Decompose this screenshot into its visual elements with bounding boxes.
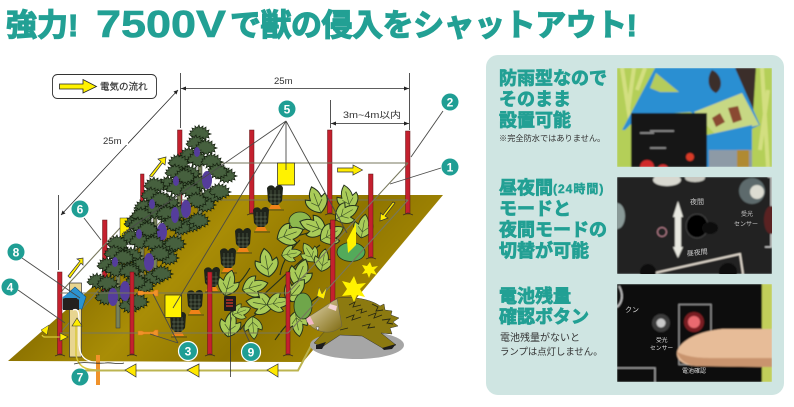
- green vine crops: [215, 182, 375, 340]
- photo: energizer in grass: [617, 68, 772, 167]
- title: 7500V: [96, 4, 227, 46]
- note: battery lamp: 電池残量がないと: [500, 331, 580, 344]
- title: 強力!: [6, 8, 78, 43]
- badge 4: [2, 278, 18, 296]
- heading: rainproof: そのまま: [499, 90, 571, 110]
- photo: mode switch: 夜間: [690, 198, 704, 206]
- heading: day/night modes: 夜間モードの: [499, 220, 607, 240]
- badge 7: [72, 368, 88, 386]
- energizer unit on stand: [63, 283, 126, 370]
- heading: battery check: 確認ボタン: [499, 307, 589, 327]
- note: not fully waterproof: ※完全防水ではありません。: [499, 133, 605, 143]
- front and right wires: [60, 163, 408, 333]
- heading: day/night modes: モードと: [499, 199, 571, 219]
- dark crop row: [170, 185, 284, 337]
- badge 9: [242, 342, 260, 362]
- dimension lines: 3m~4m以内: [343, 109, 401, 120]
- photo: battery check button: 受光: [656, 336, 668, 344]
- title: で獣の侵入をシャットアウト!: [230, 8, 637, 43]
- eggplant row: [87, 125, 237, 328]
- heading: rainproof: [499, 68, 607, 130]
- front fence posts: [55, 174, 376, 356]
- badge 5: [278, 100, 296, 118]
- heading: day/night modes: 昼夜間: [499, 178, 553, 198]
- badge 1: [442, 158, 458, 176]
- heading: rainproof: 防雨型なので: [499, 68, 607, 88]
- solar sensor device: [224, 296, 236, 311]
- badge 8: 8: [13, 246, 20, 260]
- heading: battery check: [499, 286, 589, 327]
- title: [6, 4, 637, 46]
- heading: day/night modes: [499, 178, 607, 261]
- collision stars: [342, 262, 378, 302]
- back fence posts: [102, 130, 413, 303]
- heading: day/night modes: 切替が可能: [499, 240, 589, 261]
- field: [8, 195, 443, 362]
- boar shadow: [310, 331, 404, 359]
- legend: flow of electricity: [52, 74, 156, 98]
- leader lines: [18, 111, 443, 377]
- note: battery lamp: [500, 331, 603, 357]
- heading: day/night modes: (24時間): [553, 181, 604, 196]
- photo: battery check button: センサー: [650, 345, 673, 352]
- yellow warning signs: [165, 163, 356, 318]
- badge 8: [8, 244, 24, 260]
- photo: mode switch: 受光: [741, 210, 753, 218]
- badge 2: [442, 94, 458, 110]
- badge 2: 2: [447, 96, 454, 110]
- photo: mode switch: 昼夜間: [686, 248, 708, 258]
- badge 6: 6: [77, 202, 84, 216]
- badge 5: 5: [284, 102, 291, 116]
- dimension lines: 25m: [274, 76, 293, 87]
- orange insulators: [138, 290, 158, 336]
- note: battery lamp: ランプは点灯しません。: [500, 346, 603, 357]
- photo: battery check button: クン: [625, 306, 639, 314]
- heading: rainproof: 設置可能: [499, 110, 571, 130]
- badge 6: [72, 200, 88, 218]
- yellow flow arrows, upper field: [68, 157, 395, 278]
- photo: mode switch: [617, 177, 772, 274]
- badge 3: [178, 342, 198, 360]
- badge 3: 3: [185, 344, 192, 358]
- back and side wires: [60, 163, 408, 333]
- photo: battery check button: [617, 284, 772, 382]
- panel: features: [486, 55, 784, 395]
- photo: battery check button: 電池確認: [682, 367, 706, 375]
- badge 9: 9: [248, 346, 255, 360]
- legend: flow of electricity: 電気の流れ: [100, 81, 148, 93]
- dimension lines: [58, 73, 410, 270]
- wild boar: [306, 297, 399, 350]
- ground rod and earth line: [41, 287, 327, 385]
- photo: mode switch: センサー: [734, 221, 758, 228]
- badge 1: 1: [447, 160, 454, 174]
- badge 7: 7: [77, 370, 84, 384]
- heading: battery check: 電池残量: [499, 286, 571, 306]
- dimension lines: 25m: [103, 136, 122, 147]
- badge 4: 4: [7, 280, 14, 294]
